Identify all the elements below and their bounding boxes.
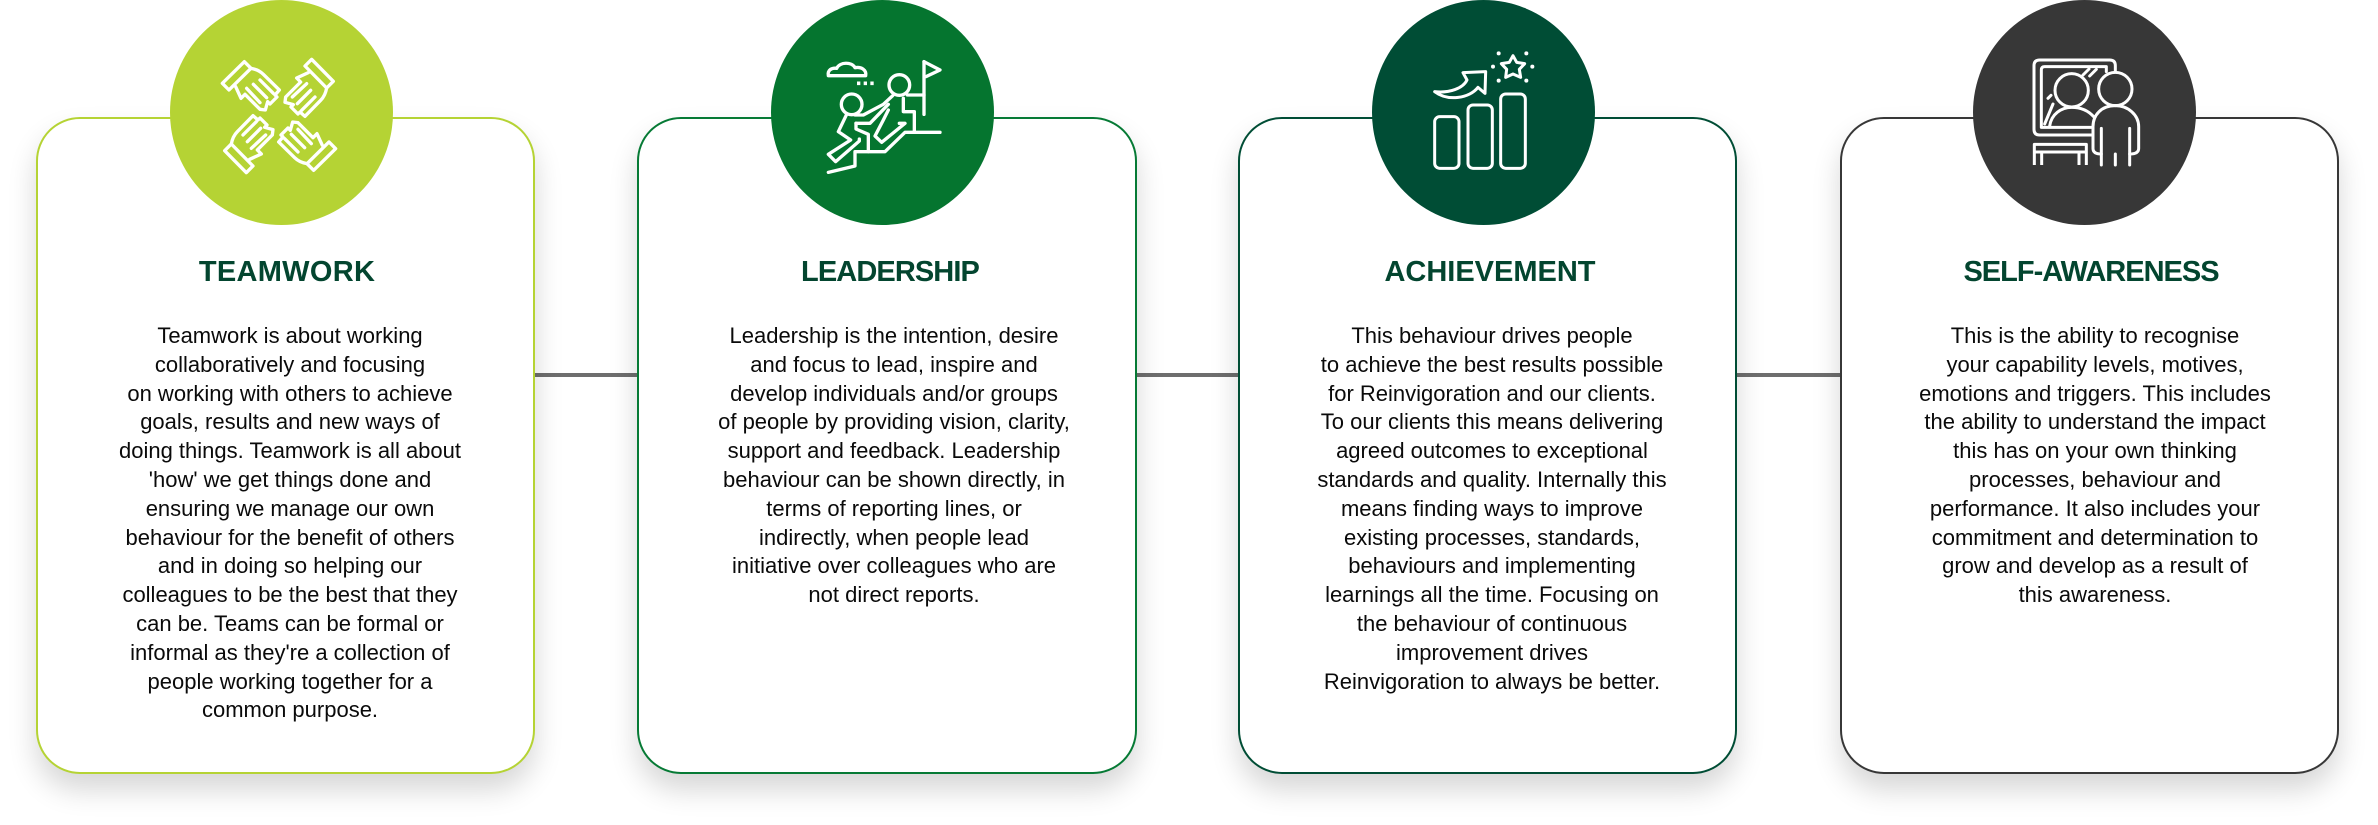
- text: leadership body: indirectly, when people lead: [759, 525, 1029, 550]
- text: achievement body: to achieve the best results possible: [1321, 352, 1663, 377]
- text: achievement body: standards and quality. Internally this: [1317, 467, 1667, 492]
- text: achievement body: agreed outcomes to exceptional: [1336, 438, 1648, 463]
- icon: achievement chart circle: [1372, 0, 1595, 225]
- text: achievement body: Reinvigoration to always be better.: [1324, 669, 1660, 694]
- text: leadership body: [718, 323, 1070, 607]
- text: achievement body: means finding ways to improve: [1341, 496, 1643, 521]
- text: self-awareness body: [1919, 323, 2271, 607]
- text: teamwork body: people working together for a: [148, 669, 432, 694]
- heading: self-awareness: SELF-AWARENESS: [1963, 256, 2219, 288]
- text: self-awareness body: This is the ability to recognise: [1951, 323, 2239, 348]
- panel: self-awareness card: [1840, 117, 2339, 774]
- text: leadership body: terms of reporting lines, or: [766, 496, 1022, 521]
- text: self-awareness body: commitment and determination to: [1932, 525, 2258, 550]
- text: teamwork body: informal as they're a collection of: [130, 640, 450, 665]
- heading: leadership: LEADERSHIP: [801, 256, 979, 288]
- text: leadership body: Leadership is the intention, desire: [730, 323, 1058, 348]
- connector: leadership to achievement: [1136, 373, 1239, 377]
- text: teamwork body: ensuring we manage our own: [146, 496, 434, 521]
- text: teamwork body: behaviour for the benefit of others: [126, 525, 454, 550]
- text: self-awareness body: this awareness.: [2019, 582, 2171, 607]
- text: leadership body: and focus to lead, inspire and: [750, 352, 1038, 377]
- text: achievement body: learnings all the time. Focusing on: [1325, 582, 1659, 607]
- text: achievement body: [1317, 323, 1667, 694]
- icon: leadership climbers circle: [771, 0, 994, 225]
- connector: achievement to self-awareness: [1737, 373, 1840, 377]
- text: self-awareness body: grow and develop as a result of: [1942, 553, 2248, 578]
- text: self-awareness body: processes, behaviour and: [1969, 467, 2221, 492]
- text: teamwork body: 'how' we get things done and: [149, 467, 431, 492]
- text: achievement body: the behaviour of continuous: [1357, 611, 1627, 636]
- connector: teamwork to leadership: [535, 373, 638, 377]
- text: teamwork body: Teamwork is about working: [157, 323, 423, 348]
- text: achievement body: To our clients this means delivering: [1321, 409, 1663, 434]
- text: teamwork body: [119, 323, 461, 722]
- text: leadership body: initiative over colleagues who are: [732, 553, 1056, 578]
- panel: achievement card: [1238, 117, 1737, 774]
- text: teamwork body: collaboratively and focusing: [155, 352, 425, 377]
- text: leadership body: behaviour can be shown directly, in: [723, 467, 1065, 492]
- text: achievement body: for Reinvigoration and our clients.: [1328, 381, 1656, 406]
- text: self-awareness body: performance. It also includes your: [1930, 496, 2260, 521]
- icon: teamwork hands circle: [170, 0, 393, 225]
- text: self-awareness body: emotions and triggers. This includes: [1919, 381, 2271, 406]
- text: teamwork body: doing things. Teamwork is all about: [119, 438, 461, 463]
- text: leadership body: of people by providing vision, clarity,: [718, 409, 1070, 434]
- panel: leadership card: [637, 117, 1137, 774]
- text: teamwork body: and in doing so helping our: [158, 553, 422, 578]
- text: self-awareness body: this has on your own thinking: [1953, 438, 2237, 463]
- text: leadership body: support and feedback. Leadership: [728, 438, 1060, 463]
- text: achievement body: improvement drives: [1396, 640, 1588, 665]
- text: teamwork body: on working with others to achieve: [127, 381, 453, 406]
- heading: teamwork: TEAMWORK: [199, 256, 375, 288]
- text: teamwork body: common purpose.: [202, 697, 378, 722]
- text: leadership body: develop individuals and/or groups: [730, 381, 1058, 406]
- icon: self-awareness mirror circle: [1973, 0, 2196, 225]
- text: leadership body: not direct reports.: [808, 582, 980, 607]
- text: achievement body: existing processes, standards,: [1344, 525, 1640, 550]
- text: teamwork body: colleagues to be the best that they: [122, 582, 458, 607]
- text: teamwork body: can be. Teams can be formal or: [136, 611, 444, 636]
- text: achievement body: This behaviour drives people: [1351, 323, 1633, 348]
- text: self-awareness body: your capability levels, motives,: [1946, 352, 2244, 377]
- heading: achievement: ACHIEVEMENT: [1384, 256, 1596, 288]
- panel: teamwork card: [36, 117, 535, 774]
- text: achievement body: behaviours and implementing: [1348, 553, 1636, 578]
- text: self-awareness body: the ability to understand the impact: [1924, 409, 2266, 434]
- text: teamwork body: goals, results and new ways of: [140, 409, 440, 434]
